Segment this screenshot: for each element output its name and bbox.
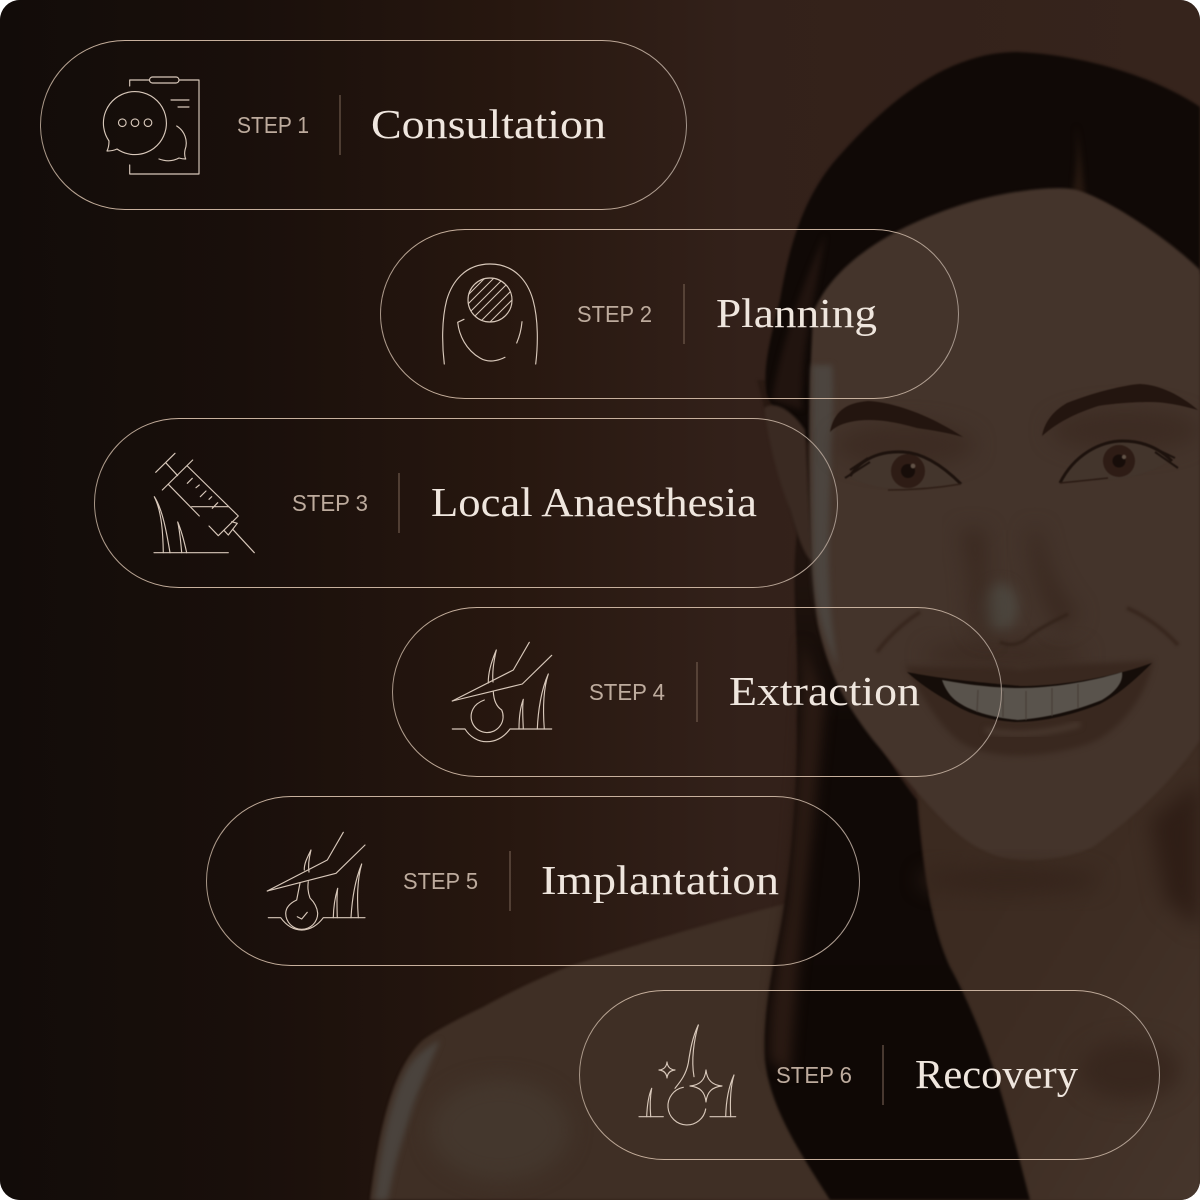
icon: head with hatched crown [443,260,537,364]
pill outline [94,418,838,588]
heading: recovery: Recovery [915,1051,1079,1097]
teeth [942,672,1122,720]
pill outline [392,608,1002,776]
left eye [845,452,961,490]
heading: planning: Planning [716,290,877,336]
face [809,188,1200,860]
heading: extraction: Extraction [729,668,920,714]
heading: implantation: Implantation [541,857,779,903]
heading: consultation: Consultation [371,101,606,147]
panel: step 1 [40,40,686,210]
neck [917,740,1200,1200]
pill outline [40,40,686,210]
label: step 1: STEP 1 [237,112,309,138]
icon: consultation clipboard with chat bubbles [103,77,199,174]
label: step 5: STEP 5 [403,868,478,894]
right eye [1060,441,1178,483]
hair crown [765,52,1200,445]
long hair [757,380,1030,1200]
icon: healthy follicle with sparkles [639,1025,736,1125]
panel: step 2 [380,230,958,398]
label: step 2: STEP 2 [577,301,652,327]
label: step 4: STEP 4 [589,679,665,705]
ear area [764,405,812,560]
heading: local anaesthesia: Local Anaesthesia [431,479,757,525]
mouth [905,660,1153,756]
icon: tweezers implanting follicle [267,832,365,930]
face shading [812,365,838,668]
shoulder and chest skin [370,880,1200,1200]
pill outline [580,990,1160,1160]
label: step 3: STEP 3 [292,490,368,516]
panel: step 5 [206,796,860,966]
icon: syringe over hair [154,453,254,553]
pill outline [380,230,958,398]
panel: step 4 [392,608,1002,776]
panel: step 6 [580,990,1160,1160]
icon: tweezers extracting follicle [452,642,552,742]
pill outline [206,796,860,966]
panel: step 3 [94,418,838,588]
eyebrows [830,401,963,437]
label: step 6: STEP 6 [776,1062,852,1088]
